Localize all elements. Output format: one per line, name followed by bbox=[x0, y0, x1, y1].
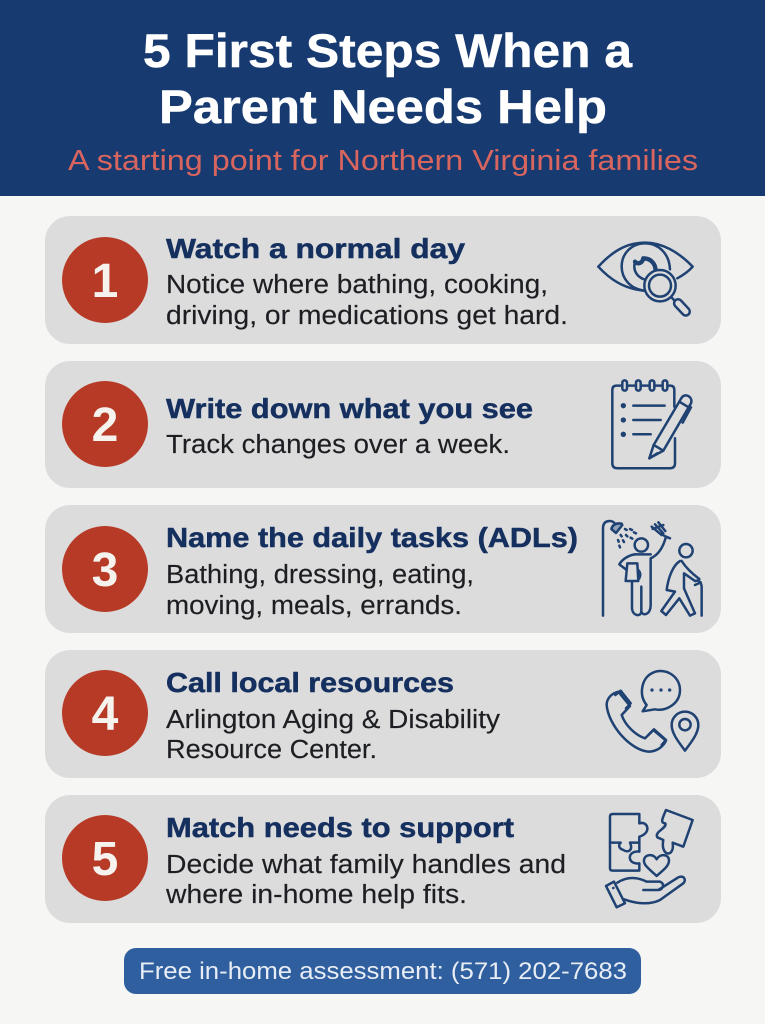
step 5 heading: Match needs to support bbox=[166, 812, 514, 843]
number badge 3: 3 bbox=[92, 544, 118, 597]
step 2 heading: Write down what you see bbox=[166, 393, 533, 424]
step 3 text: moving, meals, errands. bbox=[166, 592, 462, 620]
title bbox=[143, 24, 633, 133]
panel: step 1 bbox=[45, 216, 721, 344]
step 1 text bbox=[166, 271, 568, 330]
step 3 text bbox=[166, 561, 474, 620]
step 5 text: Decide what family handles and bbox=[166, 851, 566, 879]
step 1 heading: Watch a normal day bbox=[166, 233, 465, 264]
step 4 text: Arlington Aging & Disability bbox=[166, 706, 500, 734]
footer call to action: Free in-home assessment: (571) 202-7683 bbox=[139, 958, 627, 985]
step 4 text: Resource Center. bbox=[166, 736, 377, 764]
number badge 5 bbox=[62, 815, 148, 901]
step 3 text: Bathing, dressing, eating, bbox=[166, 561, 474, 589]
step 4 heading: Call local resources bbox=[166, 667, 454, 698]
step 1 text: Notice where bathing, cooking, bbox=[166, 271, 548, 299]
icon: phone, speech bubble and map pin bbox=[607, 671, 698, 752]
number badge 5: 5 bbox=[92, 833, 118, 886]
icon: notepad and pen bbox=[612, 380, 691, 468]
number badge 1: 1 bbox=[92, 255, 118, 308]
subtitle: A starting point for Northern Virginia families bbox=[68, 145, 698, 177]
step 1 text: driving, or medications get hard. bbox=[166, 302, 568, 330]
header banner bbox=[0, 0, 765, 196]
panel: step 5 bbox=[45, 795, 721, 923]
icon: shower, dressing and walking figures bbox=[603, 521, 702, 616]
number badge 2: 2 bbox=[92, 399, 118, 452]
number badge 1 bbox=[62, 237, 148, 323]
icon: puzzle pieces, heart and hand bbox=[606, 810, 693, 907]
step 2 text: Track changes over a week. bbox=[166, 431, 510, 459]
title: Parent Needs Help bbox=[159, 80, 607, 133]
number badge 4 bbox=[62, 670, 148, 756]
number badge 2 bbox=[62, 381, 148, 467]
step 4 text bbox=[166, 706, 500, 764]
step 3 heading: Name the daily tasks (ADLs) bbox=[166, 522, 578, 553]
icon: eye with magnifying glass bbox=[598, 243, 693, 317]
footer call to action bbox=[124, 948, 641, 994]
panel: step 2 bbox=[45, 361, 721, 488]
step 5 text bbox=[165, 851, 566, 909]
panel: step 3 bbox=[45, 505, 721, 633]
number badge 3 bbox=[62, 526, 148, 612]
panel: step 4 bbox=[45, 650, 721, 778]
number badge 4: 4 bbox=[92, 688, 119, 741]
title: 5 First Steps When a bbox=[143, 24, 633, 77]
step 5 text: where in-home help fits. bbox=[165, 881, 467, 909]
